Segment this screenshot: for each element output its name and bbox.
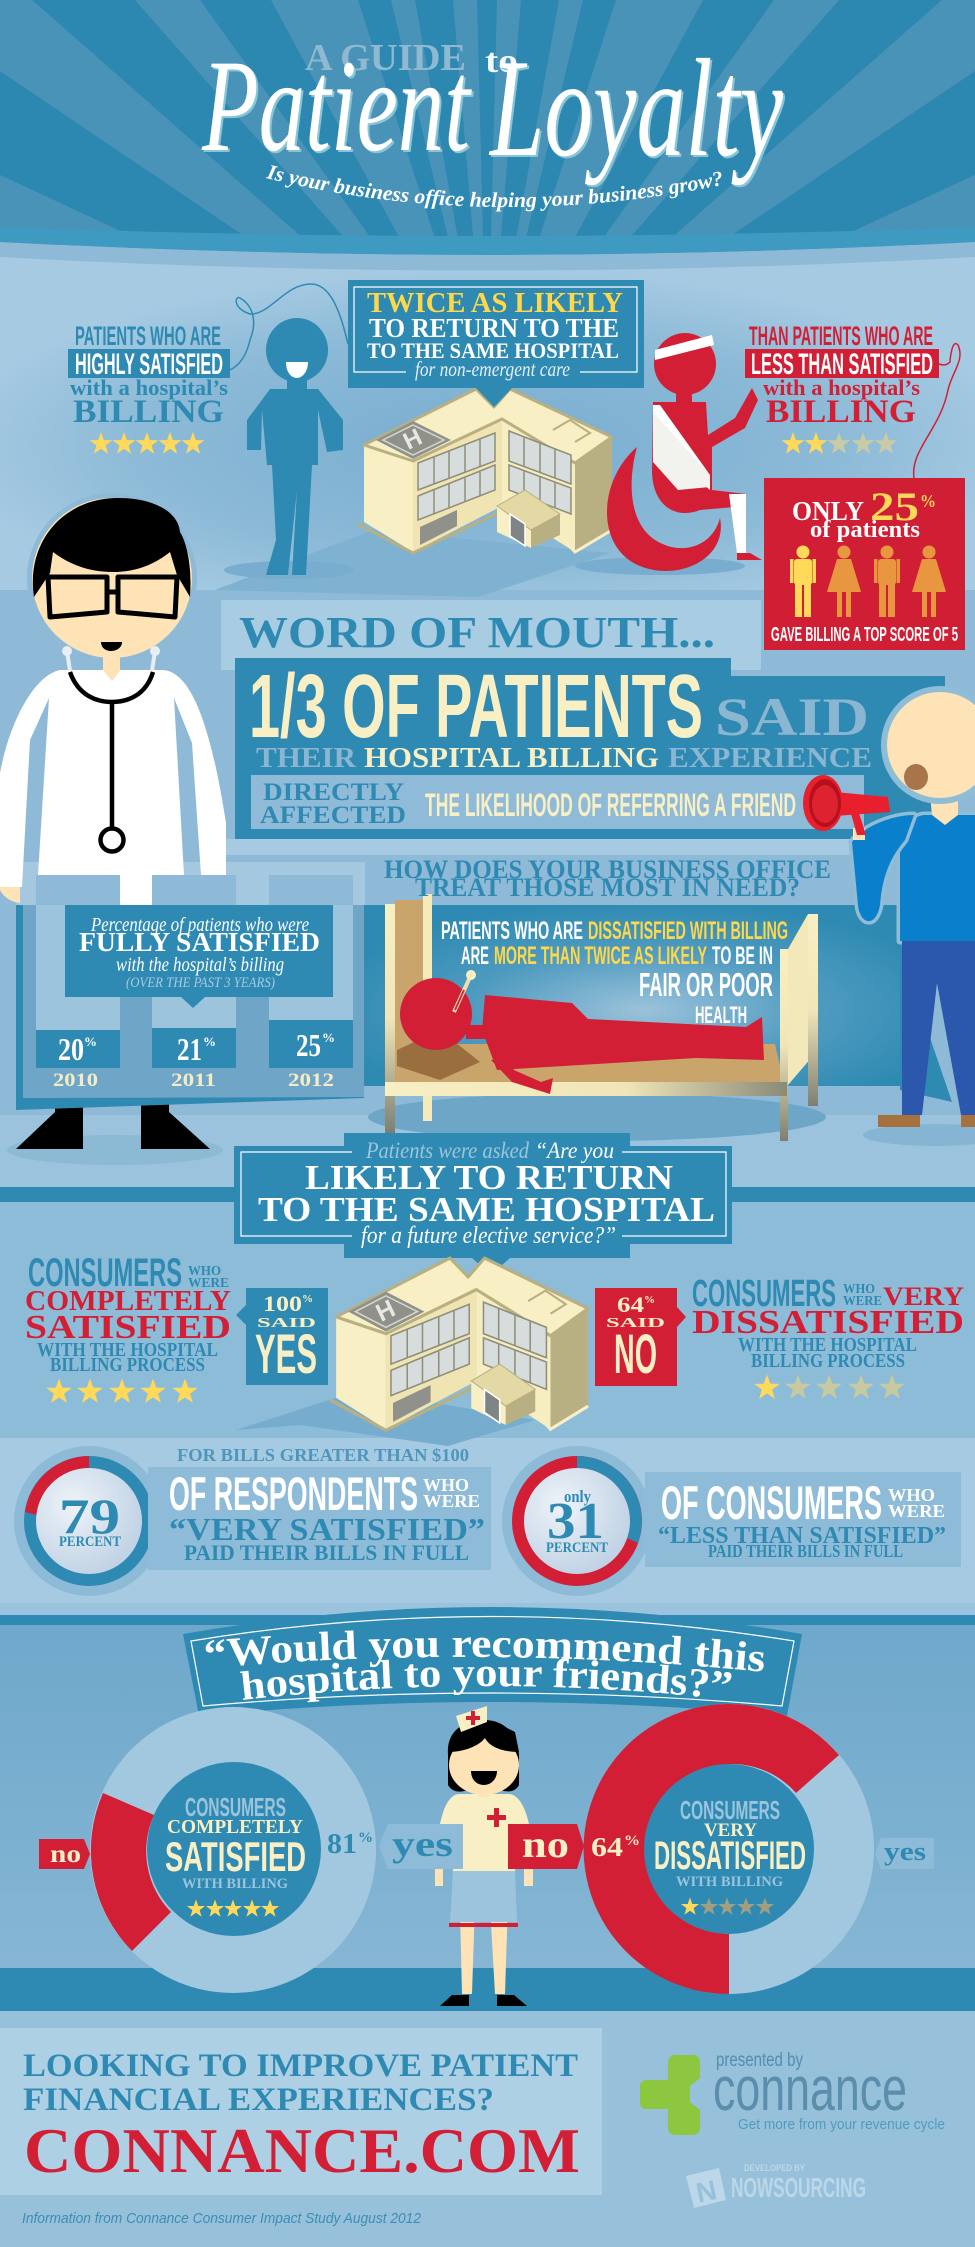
logo: nowsourcing [686, 2163, 866, 2209]
panel: call to action: FINANCIAL EXPERIENCES? [23, 2082, 494, 2118]
tag: 64% said no: % [644, 1294, 655, 1306]
panel: one third of patients: HOSPITAL BILLING [364, 743, 659, 774]
question: how does your business office treat: HOW DOES YOUR BUSINESS OFFICE [384, 855, 831, 884]
panel: fully satisfied by year chart: 20 [58, 1031, 84, 1067]
source note: Information from Connance Consumer Impact Study August 2012 [22, 2210, 422, 2227]
panel: one third of patients: AFFECTED [260, 802, 406, 829]
text: patients who are highly satisfied: HIGHLY SATISFIED [75, 348, 223, 381]
label: 64 percent [591, 1832, 640, 1862]
donut: only 31 percent: only [564, 1487, 591, 1506]
speech box: twice as likely [348, 280, 644, 407]
text: dissatisfied patients fair or poor health: DISSATISFIED WITH BILLING [588, 917, 788, 945]
arched banner: would you recommend: hospital to your friends?” [240, 1658, 732, 1702]
logo: connance: connance [713, 2055, 907, 2124]
banner: likely to return to the same hospital: TO THE SAME HOSPITAL [258, 1190, 715, 1229]
tag: 100% said yes: SAID [257, 1316, 316, 1331]
tag: 100% said yes [236, 1288, 328, 1385]
logo: connance: Get more from your revenue cycle [738, 2116, 945, 2133]
five star rating [46, 1378, 198, 1403]
panel: less than satisfied consumers: WHO [888, 1485, 935, 1505]
banner: likely to return to the same hospital: for a future elective service?” [361, 1223, 616, 1249]
panel: very satisfied respondents: OF RESPONDENTS [169, 1467, 418, 1520]
hospital building, middle [330, 1258, 588, 1430]
text: dissatisfied patients fair or poor health: PATIENTS WHO ARE [441, 917, 583, 945]
text: less than satisfied: with a hospital’s [763, 375, 920, 400]
text: consumers very dissatisfied: BILLING PROCESS [751, 1350, 905, 1372]
text: patients who are highly satisfied: with a hospital’s [70, 375, 228, 400]
donut: very dissatisfied 64% no: VERY [704, 1820, 757, 1841]
panel: fully satisfied by year chart: 25 [296, 1027, 321, 1063]
panel: very satisfied respondents: WHO [423, 1475, 469, 1495]
text: consumers very dissatisfied: CONSUMERS [692, 1273, 836, 1315]
banner: likely to return to the same hospital: LIKELY TO RETURN [305, 1158, 673, 1197]
title: A Guide to Patient Loyalty: Patient [201, 32, 472, 179]
text: dissatisfied patients fair or poor health: TO BE IN [712, 942, 773, 970]
doctor figure [0, 493, 226, 1165]
text: consumers very dissatisfied: WITH THE HOSPITAL [738, 1334, 917, 1356]
panel: fully satisfied by year chart: % [84, 1034, 97, 1049]
tag: yes, centre [379, 1824, 463, 1869]
donut: completely satisfied 81% yes: COMPLETELY [167, 1816, 304, 1838]
title: A Guide to Patient Loyalty [201, 31, 786, 212]
label: 64 percent: % [624, 1833, 640, 1849]
label: 81 percent: % [358, 1830, 373, 1846]
speech box: twice as likely: TWICE AS LIKELY [367, 287, 623, 319]
text: consumers very dissatisfied: WHO [843, 1282, 875, 1297]
text: dissatisfied patients fair or poor health: MORE THAN TWICE AS LIKELY [494, 942, 707, 970]
logo: nowsourcing: NOWSOURCING [731, 2172, 866, 2203]
panel: less than satisfied consumers: WERE [888, 1501, 945, 1521]
text: consumers completely satisfied [25, 1251, 231, 1376]
banner: likely to return to the same hospital: “Are you [535, 1138, 614, 1163]
nurse figure [435, 1706, 533, 2006]
donut: very dissatisfied 64% no: DISSATISFIED [654, 1834, 806, 1878]
man with megaphone [803, 686, 975, 1146]
title: A Guide to Patient Loyalty: Patient [203, 34, 474, 181]
red callout: only 25% of patients [764, 478, 965, 650]
speech box: twice as likely: TO RETURN TO THE [369, 313, 619, 343]
panel: one third of patients: THEIR [256, 743, 357, 774]
two star rating [782, 432, 897, 454]
tag: 100% said yes: YES [255, 1322, 317, 1385]
title: A Guide to Patient Loyalty: to [485, 43, 518, 80]
panel: fully satisfied by year chart: FULLY SATISFIED [79, 927, 320, 957]
donut: very dissatisfied 64% no: WITH BILLING [676, 1874, 783, 1890]
text: consumers completely satisfied: COMPLETELY [25, 1286, 231, 1317]
text: less than satisfied [745, 321, 939, 430]
section divider bands [0, 1615, 975, 2011]
panel: fully satisfied by year chart [16, 875, 364, 1110]
panel: fully satisfied by year chart: Percentage of patients who were [90, 914, 309, 936]
panel: fully satisfied by year chart: % [203, 1034, 216, 1049]
question: how does your business office treat [384, 855, 831, 902]
red callout: only 25% of patients: 25 [870, 484, 919, 529]
panel: call to action: LOOKING TO IMPROVE PATIENT [23, 2048, 578, 2084]
logo: connance [640, 2050, 945, 2135]
panel: one third of patients: EXPERIENCE [668, 743, 872, 774]
hospital shadow, middle [236, 1390, 535, 1446]
note: for bills greater than $100: FOR BILLS GREATER THAN $100 [177, 1445, 469, 1465]
title: A Guide to Patient Loyalty: A GUIDE [305, 37, 466, 79]
donut: very dissatisfied 64% no: CONSUMERS [680, 1795, 780, 1825]
panel: fully satisfied by year chart: % [322, 1030, 335, 1045]
logo: connance: presented by [716, 2050, 803, 2071]
banner: likely to return to the same hospital: Patients were asked [365, 1138, 529, 1163]
tag: 64% said no: SAID [606, 1316, 665, 1331]
donut: completely satisfied 81% yes: CONSUMERS [185, 1792, 286, 1822]
speech box: twice as likely: TO THE SAME HOSPITAL [367, 338, 619, 363]
label: 81 percent [327, 1828, 373, 1860]
text: dissatisfied patients fair or poor health: FAIR OR POOR [639, 966, 773, 1003]
panel: fully satisfied by year chart: 2011 [171, 1070, 216, 1091]
header banner with sun rays [0, 0, 975, 270]
text: consumers very dissatisfied [692, 1273, 964, 1372]
tag: 100% said yes: 100 [263, 1291, 302, 1316]
label: 64 percent: 64 [591, 1832, 623, 1862]
question: how does your business office treat: TREAT THOSE MOST IN NEED? [415, 873, 800, 902]
text: patients who are highly satisfied: BILLING [73, 394, 224, 430]
text: consumers completely satisfied: WERE [188, 1276, 229, 1291]
donut: very dissatisfied 64% no [584, 1704, 874, 1994]
heading: word of mouth: WORD OF MOUTH... [239, 608, 715, 657]
title: A Guide to Patient Loyalty: Loyalty [491, 33, 786, 188]
tag: yes, centre: yes [392, 1824, 453, 1864]
text: consumers completely satisfied: SATISFIED [25, 1309, 231, 1346]
text: dissatisfied patients fair or poor health: HEALTH [695, 1002, 747, 1029]
text: consumers completely satisfied: BILLING PROCESS [50, 1354, 205, 1376]
donut: 79 percent: PERCENT [59, 1534, 121, 1550]
panel: very satisfied respondents [148, 1467, 491, 1570]
text: consumers very dissatisfied: WERE [843, 1294, 882, 1309]
panel: fully satisfied by year chart: (OVER THE PAST 3 YEARS) [126, 975, 275, 991]
panel: one third of patients: DIRECTLY [263, 779, 404, 806]
text: dissatisfied patients fair or poor health [441, 917, 788, 1029]
red wheelchair patient figure [575, 333, 960, 575]
panel: one third of patients [235, 657, 945, 839]
red callout: only 25% of patients: % [920, 491, 936, 511]
tag: yes, right: yes [884, 1837, 926, 1866]
title: A Guide to Patient Loyalty: Is your business office helping your business grow? [266, 165, 722, 212]
arched banner: would you recommend: “Would you recommend this [206, 1630, 764, 1672]
chart frame behind doctor [16, 862, 365, 905]
panel: one third of patients: SAID [715, 687, 869, 747]
logo: nowsourcing: N [693, 2174, 720, 2209]
donut: only 31 percent: 31 [547, 1493, 604, 1550]
donut: completely satisfied 81% yes: WITH BILLING [182, 1876, 288, 1892]
tag: no, left [39, 1839, 90, 1869]
donut: only 31 percent [502, 1446, 652, 1596]
panel: fully satisfied by year chart: with the hospital’s billing [116, 954, 284, 976]
arched banner: would you recommend [183, 1607, 802, 1716]
tag: yes, right [875, 1837, 934, 1869]
text: consumers completely satisfied: CONSUMERS [28, 1251, 182, 1295]
donut: 79 percent [14, 1446, 164, 1596]
panel: fully satisfied by year chart: 2012 [288, 1070, 334, 1091]
tag: 100% said yes: % [302, 1293, 313, 1305]
text: consumers completely satisfied: WHO [188, 1264, 221, 1279]
text: dissatisfied patients fair or poor health: ARE [461, 942, 489, 970]
bed with red patient [368, 894, 826, 1141]
donut: completely satisfied 81% yes [90, 1707, 376, 1993]
speech box: twice as likely: for non-emergent care [415, 357, 570, 381]
panel: very satisfied respondents: PAID THEIR BILLS IN FULL [184, 1540, 469, 1565]
hospital building [358, 389, 612, 553]
panel: call to action [0, 2028, 602, 2195]
panel: less than satisfied consumers: “LESS THAN SATISFIED” [658, 1523, 946, 1549]
panel: one third of patients: 1/3 OF PATIENTS [249, 657, 703, 757]
title: A Guide to Patient Loyalty: Loyalty [489, 31, 784, 186]
panel: fully satisfied by year chart: 21 [177, 1031, 202, 1067]
tag: no, centre [508, 1824, 584, 1869]
donut: only 31 percent: PERCENT [546, 1540, 608, 1556]
text: less than satisfied: BILLING [766, 394, 916, 430]
panel: call to action: CONNANCE.COM [24, 2115, 580, 2186]
tag: 64% said no: NO [614, 1322, 657, 1385]
red callout: only 25% of patients: of patients [810, 517, 920, 543]
text: patients who are highly satisfied: PATIENTS WHO ARE [75, 321, 221, 351]
tag: no, centre: no [522, 1824, 569, 1866]
banner: likely to return to the same hospital [234, 1133, 732, 1275]
text: consumers very dissatisfied: DISSATISFIED [692, 1304, 964, 1341]
panel: fully satisfied by year chart: 2010 [53, 1070, 98, 1091]
section divider band [0, 1187, 975, 1202]
tag: 64% said no [595, 1288, 686, 1386]
tag: no, left: no [50, 1841, 81, 1868]
text: consumers completely satisfied: WITH THE HOSPITAL [37, 1339, 218, 1361]
dark panel behind bed [364, 905, 952, 1102]
five star rating [90, 432, 204, 454]
red callout: only 25% of patients: ONLY [792, 496, 864, 526]
blue satisfied patient figure [224, 284, 354, 579]
panel: very satisfied respondents: “VERY SATISFIED” [169, 1511, 485, 1547]
panel: less than satisfied consumers [645, 1472, 961, 1567]
text: consumers very dissatisfied: VERY [883, 1282, 964, 1311]
word of mouth light panel [221, 600, 761, 670]
donut: 79 percent: 79 [59, 1488, 120, 1544]
panel: less than satisfied consumers: PAID THEIR BILLS IN FULL [708, 1541, 903, 1561]
logo: nowsourcing: DEVELOPED BY [744, 2163, 805, 2173]
tag: 64% said no: 64 [617, 1292, 644, 1317]
donut: completely satisfied 81% yes: SATISFIED [165, 1833, 306, 1880]
text: patients who are highly satisfied [68, 321, 230, 430]
one star rating [754, 1374, 905, 1399]
hospital shadow, top [215, 530, 610, 597]
label: 81 percent: 81 [327, 1828, 357, 1860]
panel: very satisfied respondents: WERE [423, 1491, 480, 1511]
